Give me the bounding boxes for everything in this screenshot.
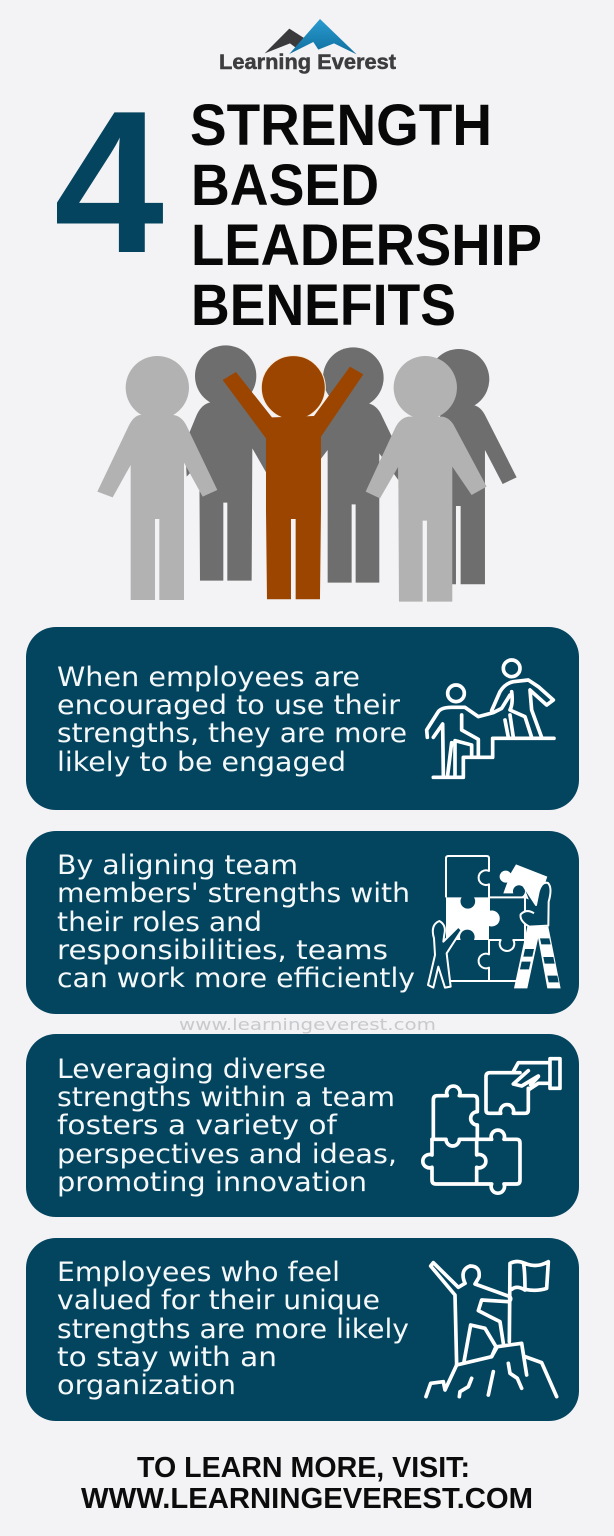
call to action footer xyxy=(81,1452,533,1515)
title: LEADERSHIP xyxy=(191,213,542,278)
text: innovation xyxy=(57,1054,397,1198)
text: retention: valued for their unique xyxy=(57,1285,380,1316)
text: innovation: Leveraging diverse xyxy=(57,1054,326,1085)
illustration: group of people with raised-arm leader xyxy=(97,345,517,602)
dark figure right xyxy=(320,347,398,583)
text: engagement: strengths, they are more xyxy=(57,718,407,749)
numeral 4: 4 xyxy=(54,69,164,296)
logo wordmark: Learning Everest xyxy=(219,51,396,74)
text: engagement xyxy=(57,662,407,778)
dark figure far right xyxy=(429,349,517,584)
panel: efficiency xyxy=(26,831,579,1014)
title: BASED xyxy=(191,153,379,218)
text: engagement: likely to be engaged xyxy=(57,747,346,778)
text: efficiency: members' strengths with xyxy=(57,878,410,909)
dark figure left xyxy=(185,345,270,581)
text: retention xyxy=(57,1257,409,1401)
text: innovation: perspectives and ideas, xyxy=(57,1139,397,1170)
icon: mountains xyxy=(265,19,357,54)
panel: retention xyxy=(26,1238,579,1421)
icon: two people climbing stairs xyxy=(427,660,554,777)
text: innovation: strengths within a team xyxy=(57,1082,395,1113)
text: retention: to stay with an xyxy=(57,1342,277,1373)
icon: person on summit with flag xyxy=(426,1261,557,1397)
watermark: www.learningeverest.com xyxy=(179,1015,436,1034)
text: efficiency: By aligning team xyxy=(57,850,298,881)
text: innovation: fosters a variety of xyxy=(57,1110,338,1141)
text: engagement: encouraged to use their xyxy=(57,690,400,721)
icon: hand placing puzzle pieces xyxy=(423,1059,560,1193)
call to action footer: TO LEARN MORE, VISIT: xyxy=(137,1452,470,1484)
text: retention: organization xyxy=(57,1370,236,1401)
text: efficiency: their roles and xyxy=(57,907,262,938)
orange central figure xyxy=(223,356,363,599)
text: retention: Employees who feel xyxy=(57,1257,340,1288)
light figure right xyxy=(366,356,487,602)
panel: engagement xyxy=(26,627,579,810)
title: STRENGTH xyxy=(190,93,492,158)
text: engagement: When employees are xyxy=(57,662,360,693)
light figure left xyxy=(97,356,217,600)
text: retention: strengths are more likely xyxy=(57,1314,409,1345)
title xyxy=(190,93,542,338)
call to action footer: WWW.LEARNINGEVEREST.COM xyxy=(81,1483,533,1515)
text: innovation: promoting innovation xyxy=(57,1167,367,1198)
panel: innovation xyxy=(26,1034,579,1217)
text: efficiency: responsibilities, teams xyxy=(57,935,388,966)
ladder xyxy=(514,927,561,988)
icon: team assembling puzzle xyxy=(428,856,561,988)
text: efficiency xyxy=(57,850,415,994)
title: BENEFITS xyxy=(191,273,456,338)
text: efficiency: can work more efficiently xyxy=(57,963,415,994)
logo: Learning Everest xyxy=(219,19,396,74)
